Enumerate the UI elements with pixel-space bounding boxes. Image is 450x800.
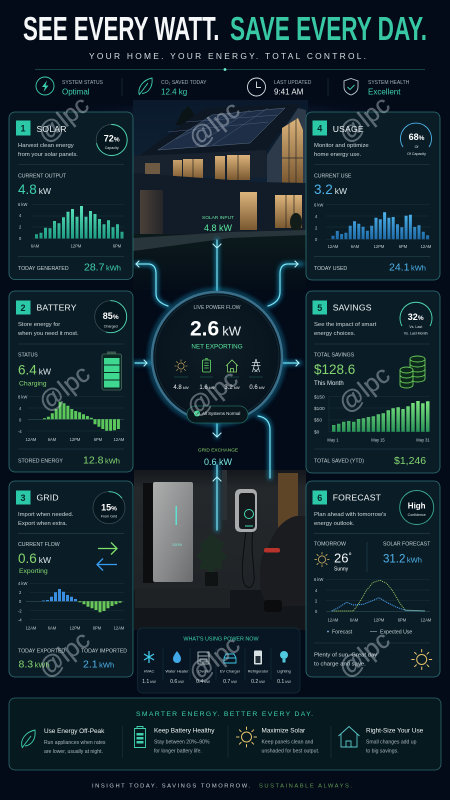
chart legend xyxy=(327,630,412,636)
badge 6 xyxy=(312,490,327,504)
description: when you need it most. xyxy=(17,331,79,337)
badge 4 xyxy=(312,120,327,136)
watermarks: @lpc xyxy=(333,91,395,149)
badge 5 xyxy=(312,300,327,314)
tip: battery: for longer battery life. xyxy=(154,748,202,754)
appliance: refrigerator: Refrigerator xyxy=(248,668,269,674)
forecast line chart: 2 xyxy=(315,598,318,604)
tip: usage: Small changes add up xyxy=(366,740,417,746)
panel: solar: CURRENT OUTPUT xyxy=(18,174,67,180)
panel: usage: TODAY USED xyxy=(314,266,347,272)
panel: forecast: SOLAR FORECAST xyxy=(383,542,431,548)
solar input label: 4.8 kW xyxy=(204,223,233,233)
description: Store energy for xyxy=(18,322,60,328)
live power flow gauge: NET EXPORTING xyxy=(191,344,243,350)
badge 2 xyxy=(16,300,30,314)
badge 2: 2 xyxy=(20,303,26,313)
status: system status: Optimal xyxy=(62,88,90,96)
live power flow gauge: LIVE POWER FLOW xyxy=(194,305,241,311)
appliance: hvac: 1.1 kW xyxy=(142,679,156,685)
status: system health: SYSTEM HEALTH xyxy=(368,80,410,86)
usage bar chart: 12AM xyxy=(421,244,432,249)
solar input label xyxy=(202,215,234,233)
description: See the impact of smart xyxy=(314,322,377,328)
appliance: ev charger: EV Charger xyxy=(220,668,241,674)
forecast note xyxy=(314,652,377,668)
tip: usage: Right-Size Your Use xyxy=(366,728,424,734)
usage bar chart: 4 xyxy=(315,214,318,219)
savings bar chart: May 15 xyxy=(371,438,385,442)
arrowheads xyxy=(136,244,299,481)
appliance: water heater: 0.6 kW xyxy=(170,679,184,685)
status bar xyxy=(36,77,410,96)
appliance: water heater: Water Heater xyxy=(166,668,189,674)
appliance: oven: Oven xyxy=(198,668,208,674)
current flow value: 0.6kW xyxy=(18,551,51,566)
usage bar chart: 0 xyxy=(315,237,318,242)
badge 1 xyxy=(16,120,30,136)
tips heading: SMARTER ENERGY. BETTER EVERY DAY. xyxy=(136,711,313,718)
temperature: 26 xyxy=(334,550,348,566)
heading: FORECAST xyxy=(333,492,382,502)
panel: grid: Exporting xyxy=(19,568,48,575)
today exported: TODAY EXPORTED xyxy=(18,648,65,654)
savings bar chart: $0 xyxy=(314,430,320,436)
usage bar chart xyxy=(314,202,432,249)
icon: sun xyxy=(412,650,432,670)
solar bar chart: 2 xyxy=(19,224,22,230)
today exported xyxy=(18,648,65,670)
capacity ring xyxy=(400,123,431,156)
battery bar chart: 6AM xyxy=(48,437,57,442)
status: last updated: 9:41 AM xyxy=(274,88,304,96)
savings ring xyxy=(400,302,432,336)
grid bar chart: -4 xyxy=(18,618,22,622)
savings bar chart: $150 xyxy=(314,394,325,400)
charge ring: Charged xyxy=(104,324,118,328)
today generated value: 28.7kWh xyxy=(84,262,121,274)
tip: solar xyxy=(236,727,319,754)
stored energy value: 12.8kWh xyxy=(83,454,120,466)
forecast line chart: 6 kW xyxy=(314,577,323,582)
grid bar chart: 0 xyxy=(19,599,22,604)
description xyxy=(314,143,369,158)
appliance: hvac: HVAC xyxy=(144,668,154,674)
solar forecast value: 31.2kWh xyxy=(383,554,422,566)
battery bar chart: 12AM xyxy=(26,437,37,442)
heading: GRID xyxy=(36,492,59,502)
potted plant xyxy=(196,533,227,586)
savings bar chart: $50 xyxy=(314,418,322,424)
solar input label: SOLAR INPUT xyxy=(202,215,234,221)
tip: off-peak: Use Energy Off-Peak xyxy=(44,728,105,735)
savings ring: Vs. Last xyxy=(409,325,422,329)
header divider xyxy=(35,68,425,71)
temperature: Sunny xyxy=(334,566,349,572)
savings bar chart: May 31 xyxy=(416,438,430,442)
panel: what's using power now: WHAT'S USING POWER NOW xyxy=(183,636,260,642)
panel: grid: CURRENT FLOW xyxy=(18,542,60,548)
forecast line chart: 0 xyxy=(315,609,318,614)
solar bar chart: 6AM xyxy=(31,244,40,248)
status: co2 saved: 12.4 kg xyxy=(161,88,187,96)
forecast line chart: 12PM xyxy=(374,618,385,622)
forecast note: to charge and save. xyxy=(314,662,366,668)
watermarks: @lpc xyxy=(33,626,95,684)
watermarks: @lpc xyxy=(33,360,95,418)
grid exchange label: GRID EXCHANGE xyxy=(198,448,238,454)
from grid ring xyxy=(93,492,125,524)
heading: SAVINGS xyxy=(333,302,372,312)
gauge icon: battery xyxy=(202,359,210,372)
panel: what's using power now xyxy=(138,628,300,693)
today used value: 24.1kWh xyxy=(389,262,426,274)
battery level icon xyxy=(102,352,122,390)
capacity ring: Of xyxy=(415,145,418,149)
panel: forecast: TOMORROW xyxy=(314,542,346,548)
grid bar chart: 12PM xyxy=(70,626,81,630)
panel: savings: This Month xyxy=(314,381,344,387)
panel: solar xyxy=(9,112,133,280)
from grid ring: 15% xyxy=(101,502,117,512)
watermarks xyxy=(32,91,395,689)
tip: usage: to big savings. xyxy=(366,748,399,754)
confidence ring: Confidence xyxy=(408,513,426,517)
grid exchange label xyxy=(198,448,238,467)
electric car xyxy=(260,516,306,612)
usage bar chart: 12PM xyxy=(374,244,385,249)
status: system health: Excellent xyxy=(368,88,401,96)
badge 6: 6 xyxy=(317,493,322,503)
panel: battery: Charging xyxy=(19,380,47,388)
appliance: hvac xyxy=(142,651,156,685)
savings bar chart: $100 xyxy=(314,406,325,412)
usage bar chart: 6PM xyxy=(399,244,408,249)
capacity ring: Of Capacity xyxy=(407,152,426,156)
total saved value: $1,246 xyxy=(394,455,426,467)
battery power value: 6.4kW xyxy=(18,362,51,378)
panel: battery xyxy=(9,291,133,472)
status: system status: SYSTEM STATUS xyxy=(62,80,104,86)
capacity ring xyxy=(96,124,127,156)
appliance: lighting xyxy=(277,651,291,685)
icon: coin stacks xyxy=(400,356,425,388)
house photo xyxy=(133,100,308,290)
tip: off-peak xyxy=(22,728,106,755)
status: co2 saved xyxy=(139,78,207,96)
live power flow gauge xyxy=(150,290,284,424)
grid exchange label: 0.6 kW xyxy=(204,457,233,467)
panel: savings: TOTAL SAVED (YTD) xyxy=(314,458,364,464)
today imported: 2.1kWh xyxy=(83,658,114,670)
appliance: water heater xyxy=(166,651,189,685)
appliance: lighting: 0.1 kW xyxy=(277,679,291,685)
battery bar chart: 8 kW xyxy=(18,394,27,400)
tip: usage xyxy=(338,726,424,754)
wall battery unit xyxy=(143,482,193,583)
panel: savings: TOTAL SAVINGS xyxy=(314,352,355,358)
tip: solar: Keep panels clean and xyxy=(262,740,313,746)
usage bar chart: 2 xyxy=(315,226,318,230)
watermarks: @lpc xyxy=(32,91,94,149)
tip: battery: Stay between 20%–90% xyxy=(154,740,210,746)
heading: SOLAR xyxy=(36,124,67,134)
description: Harvest clean energy xyxy=(18,143,74,149)
description: Plan ahead with tomorrow's xyxy=(314,512,386,518)
capacity ring: 72% xyxy=(104,134,120,144)
net power reading: 2.6kW xyxy=(190,318,242,340)
status: system health xyxy=(344,78,410,96)
battery bar chart: 12PM xyxy=(70,437,81,442)
from grid ring: From Grid xyxy=(101,514,117,518)
title: SEE EVERY WATT. xyxy=(23,11,220,48)
tip: solar: Maximize Solar xyxy=(262,728,306,734)
panel: tips xyxy=(9,698,441,770)
gauge readings: 4.8 kW xyxy=(173,385,189,391)
panel: solar: TODAY GENERATED xyxy=(18,266,69,272)
footer tagline: SUSTAINABLE ALWAYS. xyxy=(259,784,352,790)
charge ring: 85% xyxy=(103,311,119,321)
panel: usage xyxy=(306,112,440,280)
status: system status xyxy=(36,77,104,96)
description: Import when needed. xyxy=(18,512,74,518)
panel: battery: STORED ENERGY xyxy=(18,458,63,464)
appliance: refrigerator: 0.2 kW xyxy=(251,679,265,685)
forecast line chart xyxy=(314,577,432,622)
today exported: 8.3kWh xyxy=(18,658,50,670)
grid bar chart: 2 xyxy=(19,590,22,595)
watermarks: @lpc xyxy=(181,365,243,423)
usage bar chart: 12AM xyxy=(328,244,339,249)
capacity ring: 68% xyxy=(409,132,425,142)
panel: usage: CURRENT USE xyxy=(314,174,352,180)
tip: solar: unshaded for best output. xyxy=(262,748,319,754)
solar bar chart: 0 xyxy=(19,236,22,241)
tip: off-peak: Run appliances when rates xyxy=(44,740,106,746)
watermarks: @lpc xyxy=(333,361,395,419)
footer tagline xyxy=(92,784,352,790)
capacity ring: Capacity xyxy=(105,146,119,150)
grid bar chart: 12AM xyxy=(26,626,37,630)
today imported xyxy=(81,648,127,670)
gauge icon: pylon xyxy=(252,359,260,372)
garage scene xyxy=(134,470,306,630)
grid bar chart: 4 kW xyxy=(18,581,27,586)
savings bar chart xyxy=(314,394,430,442)
description: energy outlook. xyxy=(314,521,355,527)
savings ring: 32% xyxy=(408,312,424,322)
battery bar chart: 0 xyxy=(19,418,22,422)
heading: USAGE xyxy=(333,124,364,134)
temperature xyxy=(334,550,352,572)
savings ring: Vs. Last Month xyxy=(404,332,428,336)
heading: BATTERY xyxy=(36,302,77,312)
description: energy choices. xyxy=(314,331,356,337)
tip: off-peak: are lower, usually at night. xyxy=(44,749,103,755)
solar bar chart: 6 kW xyxy=(18,202,27,207)
tip: battery: Keep Battery Healthy xyxy=(154,728,215,734)
battery bar chart: 6PM xyxy=(94,437,103,442)
solar bar chart: 4 xyxy=(19,213,22,218)
badge 3 xyxy=(16,490,30,504)
footer tagline: INSIGHT TODAY. SAVINGS TOMORROW. xyxy=(92,784,250,790)
all systems normal pill: All Systems Normal xyxy=(202,411,240,416)
total savings value: $128.6 xyxy=(314,362,355,377)
gauge readings: 1.6 kW xyxy=(199,385,215,391)
solar bar chart: 6PM xyxy=(113,244,122,248)
panel: savings xyxy=(306,291,440,473)
temperature: ° xyxy=(348,552,352,560)
status: last updated xyxy=(248,78,312,96)
charge ring xyxy=(95,301,127,333)
subtitle: YOUR HOME. YOUR ENERGY. TOTAL CONTROL. xyxy=(89,51,366,61)
description: home energy use. xyxy=(314,152,362,158)
description xyxy=(314,322,377,337)
forecast line chart: 6PM xyxy=(398,618,407,622)
forecast note: Plenty of sun. Great day xyxy=(314,652,377,658)
appliance: oven xyxy=(196,652,210,685)
icon: sun xyxy=(315,552,329,567)
gauge icon: sun xyxy=(175,360,187,372)
gauge readings: 0.6 kW xyxy=(249,385,265,391)
savings bar chart: May 1 xyxy=(327,438,339,442)
badge 4: 4 xyxy=(317,124,322,134)
battery bar chart: 12AM xyxy=(114,437,125,442)
appliance: ev charger xyxy=(220,654,241,685)
battery bar chart xyxy=(18,394,125,442)
confidence ring xyxy=(400,490,434,524)
status: last updated: LAST UPDATED xyxy=(274,80,312,86)
chart legend: Expected Use xyxy=(380,630,412,636)
forecast line chart: 4 xyxy=(315,588,318,593)
ev charger xyxy=(235,489,257,588)
description: Monitor and optimize xyxy=(314,143,369,149)
description: Export when extra. xyxy=(18,521,67,527)
battery bar chart: -4 xyxy=(18,429,22,434)
current use value: 3.2kW xyxy=(314,182,347,197)
watermarks: @lpc xyxy=(333,626,395,684)
panel: battery: STATUS xyxy=(18,352,38,358)
appliance: refrigerator xyxy=(248,650,269,685)
chart legend: Forecast xyxy=(332,630,353,636)
gauge icon: house xyxy=(226,360,238,372)
appliance: ev charger: 0.7 kW xyxy=(223,679,237,685)
watermarks: @lpc xyxy=(183,631,245,689)
battery bar chart: 4 xyxy=(19,406,22,411)
flow lines xyxy=(135,240,302,530)
tip: battery xyxy=(134,726,215,754)
today imported: TODAY IMPORTED xyxy=(81,648,127,654)
badge 5: 5 xyxy=(317,303,322,313)
confidence ring: High xyxy=(408,502,426,510)
grid bar chart: 12AM xyxy=(114,626,125,630)
forecast line chart: 12AM xyxy=(328,618,339,622)
solar bar chart: 12PM xyxy=(71,244,82,248)
grid bar chart: 6PM xyxy=(93,626,102,630)
badge 1: 1 xyxy=(20,124,26,134)
panel: grid xyxy=(9,481,133,677)
solar bar chart xyxy=(18,202,124,248)
gauge readings xyxy=(173,385,265,391)
appliance: lighting: Lighting xyxy=(277,668,291,674)
appliance: oven: 0.4 kW xyxy=(196,679,210,685)
grid bar chart: -2 xyxy=(18,608,22,614)
door glow xyxy=(278,473,298,533)
status: co2 saved: CO₂ SAVED TODAY xyxy=(161,80,207,86)
usage bar chart: 6 kW xyxy=(314,202,323,208)
description: from your solar panels. xyxy=(18,152,78,158)
wall battery unit: 100% xyxy=(172,542,183,547)
badge 3: 3 xyxy=(20,493,26,503)
current output value: 4.8kW xyxy=(18,182,51,197)
gauge readings: 3.2 kW xyxy=(224,385,240,391)
watermarks: @lpc xyxy=(183,96,245,154)
icon: export and import arrows xyxy=(97,542,117,570)
forecast line chart: 12AM xyxy=(421,618,432,622)
panel: forecast xyxy=(306,481,440,677)
usage bar chart: 6AM xyxy=(351,244,360,249)
description xyxy=(314,512,386,527)
forecast line chart: 6AM xyxy=(350,618,359,622)
grid bar chart: 6AM xyxy=(48,626,57,630)
description xyxy=(17,322,79,337)
grid bar chart xyxy=(18,581,125,630)
description xyxy=(18,512,74,527)
description xyxy=(18,143,78,158)
